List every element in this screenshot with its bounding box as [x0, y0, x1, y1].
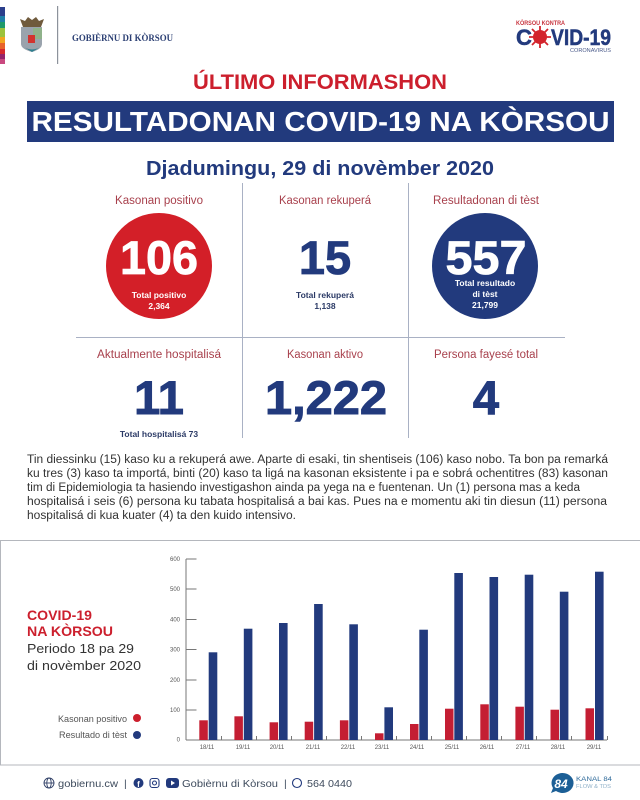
stat: resultadonan di test: [432, 195, 540, 319]
banner: RESULTADONAN COVID-19 NA KÒRSOU: [32, 106, 610, 137]
icon: globe: [44, 778, 54, 788]
stat: kasonan positivo: Total positivo: [132, 290, 186, 300]
icon: facebook: [134, 778, 144, 789]
stat: resultadonan di test: Total resultado: [455, 278, 515, 288]
stat: kasonan positivo: Kasonan positivo: [115, 195, 203, 207]
footer contact bar: 564 0440: [307, 778, 352, 790]
stat: kasonan rekupera: Total rekuperá: [296, 290, 354, 300]
y axis: 300: [170, 648, 181, 654]
red bars: kasonan positivo: [199, 704, 594, 740]
x labels: 27/11: [516, 745, 531, 751]
stat: resultadonan di test: Resultadonan di tèst: [433, 195, 540, 207]
summary paragraph: tim di Epidemiologia ta hasiendo investigashon ainda pa yega na e fuentenan. Un (1) persona mas a keda: [27, 482, 581, 494]
y axis: 400: [170, 618, 181, 624]
covid-19 logo: CORONAVIRUS: [570, 48, 611, 54]
y axis: 500: [170, 587, 181, 593]
stat: persona fayese total: [434, 349, 538, 424]
logo: kanal 84: 84: [554, 777, 568, 791]
stat: persona fayese total: Persona fayesé total: [434, 349, 538, 361]
x labels: 21/11: [306, 745, 321, 751]
footer contact bar: gobiernu.cw: [58, 778, 118, 790]
icon: virus: [529, 26, 551, 48]
covid-19 logo: VID-19: [551, 25, 611, 50]
x labels: 18/11: [200, 745, 215, 751]
title: ÚLTIMO INFORMASHON: [193, 70, 447, 94]
stat: resultadonan di test: 557: [446, 231, 526, 284]
covid-19 logo: KÒRSOU KONTRA: [516, 19, 566, 27]
x labels: 22/11: [341, 745, 356, 751]
covid-19 logo: C: [516, 25, 532, 50]
summary paragraph: ku tres (3) kaso ta importá, binti (20) kaso ta ligá na kasonan eksistente i pa e sobrá ochentitres (83) kasonan: [27, 468, 608, 480]
chart heading: NA KÒRSOU: [27, 622, 113, 639]
x axis: [186, 736, 608, 740]
stat: kasonan positivo: 2,364: [148, 301, 170, 311]
stat: kasonan positivo: [106, 195, 212, 319]
organisation name: GOBIÈRNU DI KÒRSOU: [72, 32, 173, 44]
stat: aktualmente hospitalisa: Total hospitalisá 73: [120, 429, 198, 439]
legend: Kasonan positivo: [58, 714, 127, 724]
icon: youtube: [166, 778, 179, 788]
chart heading: [27, 607, 141, 673]
x labels: 29/11: [587, 745, 602, 751]
y axis: 600: [170, 557, 181, 563]
bar chart: [170, 557, 608, 751]
stat: kasonan rekupera: 15: [299, 231, 351, 284]
x labels: 19/11: [236, 745, 251, 751]
x labels: 25/11: [445, 745, 460, 751]
y axis: 200: [170, 678, 181, 684]
chart panel: [0, 540, 640, 765]
footer contact bar: |: [124, 778, 127, 790]
y axis: 100: [170, 708, 181, 714]
summary paragraph: [27, 454, 609, 522]
date heading: Djadumingu, 29 di novèmber 2020: [146, 158, 494, 180]
summary paragraph: Tin diessinku (15) kaso ku a rekuperá awe. Aparte di esaki, tin shentiseis (106) kaso nobo. Ta bon pa remarká: [27, 454, 609, 466]
footer contact bar: Gobièrnu di Kòrsou: [182, 778, 278, 790]
icon: instagram: [150, 778, 159, 788]
footer contact bar: |: [284, 778, 287, 790]
logo: kanal 84: KANAL 84: [576, 777, 613, 783]
icon: coat of arms: [20, 17, 44, 52]
icon: facebook: f: [137, 780, 140, 789]
stat: kasonan rekupera: [279, 195, 372, 311]
stat: kasonan aktivo: Kasonan aktivo: [287, 349, 363, 361]
x labels: 24/11: [410, 745, 425, 751]
chart heading: di novèmber 2020: [27, 658, 141, 673]
blue bars: resultado di test: [209, 572, 604, 740]
stats grid lines: [76, 183, 565, 438]
stat: aktualmente hospitalisa: [97, 349, 222, 439]
chart heading: Periodo 18 pa 29: [27, 641, 134, 656]
stat: aktualmente hospitalisa: 11: [134, 371, 184, 424]
y axis: [170, 557, 196, 744]
summary paragraph: hospitalisá i seis (6) persona ku tabata hospitalisá a bai kas. Pues na e momentu aki tin diesun (11) persona: [27, 496, 608, 508]
stat: kasonan rekupera: Kasonan rekuperá: [279, 195, 372, 207]
header divider: [57, 6, 58, 64]
logo: kanal 84: FLOW & TDS: [576, 784, 612, 790]
y axis: 0: [177, 738, 181, 744]
stat: kasonan aktivo: [265, 349, 387, 424]
footer contact bar: [44, 773, 613, 793]
x labels: [200, 745, 602, 751]
stat: resultadonan di test: 21,799: [472, 300, 498, 310]
x labels: 23/11: [375, 745, 390, 751]
stat: kasonan rekupera: 1,138: [314, 301, 336, 311]
stat: resultadonan di test: di tèst: [472, 289, 498, 299]
covid-19 logo: [516, 19, 611, 54]
stat: aktualmente hospitalisa: Aktualmente hospitalisá: [97, 349, 222, 361]
icon: whatsapp: [292, 778, 302, 788]
x labels: 26/11: [480, 745, 495, 751]
rainbow strip: [0, 7, 5, 64]
legend: [58, 714, 141, 740]
logo: kanal 84: [551, 773, 613, 793]
stat: persona fayese total: 4: [473, 371, 499, 424]
summary paragraph: hospitalisá di kua kuater (4) ta den kuido intensivo.: [27, 510, 296, 522]
chart heading: COVID-19: [27, 607, 92, 623]
legend: Resultado di tèst: [59, 730, 127, 740]
x labels: 28/11: [551, 745, 566, 751]
stat: kasonan aktivo: 1,222: [265, 371, 387, 424]
stat: kasonan positivo: 106: [120, 231, 198, 284]
x labels: 20/11: [270, 745, 285, 751]
